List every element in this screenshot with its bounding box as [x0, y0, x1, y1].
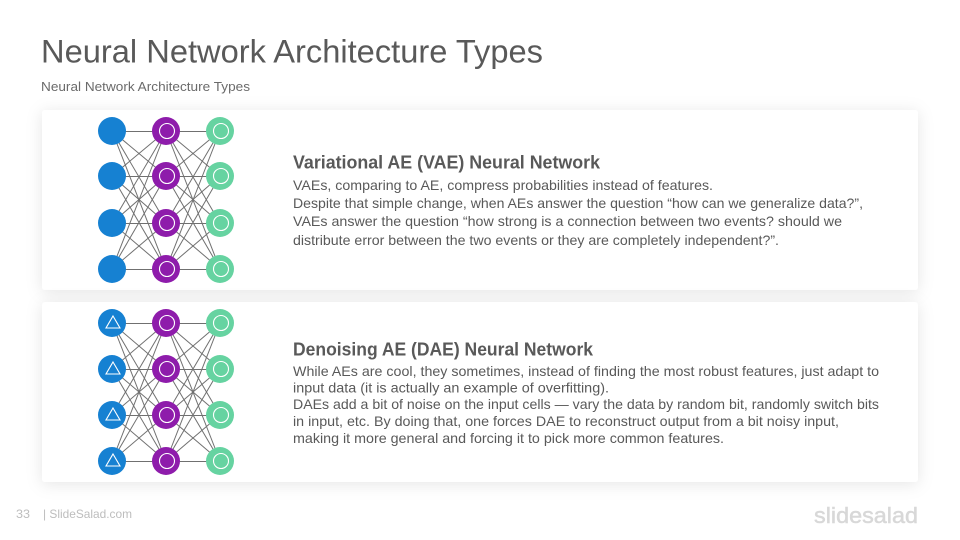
- text block: DAE description: making it more general and forcing it to pick more common features.: [293, 430, 724, 446]
- title: Neural Network Architecture Types: [41, 34, 543, 70]
- text block: VAE description: [293, 177, 863, 248]
- subtitle: Neural Network Architecture Types: [41, 80, 250, 94]
- text block: VAE description: Despite that simple change, when AEs answer the question “how can we generalize data?”,: [293, 195, 863, 211]
- text block: VAE description: VAEs, comparing to AE, compress probabilities instead of features.: [293, 177, 713, 193]
- text block: VAE description: VAEs answer the question “how strong is a connection between two events? should we: [293, 213, 842, 229]
- logo: slidesalad: slidesalad: [814, 503, 918, 528]
- panel background: [42, 302, 918, 482]
- heading: DAE: Denoising AE (DAE) Neural Network: [293, 340, 594, 360]
- panel: variational AE: [42, 110, 918, 290]
- text block: DAE description: in input, etc. By doing that, one forces DAE to reconstruct output from a bit noisy input,: [293, 413, 839, 429]
- panel background: [42, 110, 918, 290]
- footer source: | SlideSalad.com: [43, 507, 132, 521]
- panel: denoising AE: [42, 302, 918, 482]
- text block: DAE description: input data (it is actually an example of overfitting).: [293, 380, 609, 396]
- text block: VAE description: distribute error between the two events or they are completely independent?”.: [293, 232, 779, 248]
- network diagram: VAE: [98, 117, 234, 283]
- text block: DAE description: DAEs add a bit of noise on the input cells — vary the data by random bit, randomly switch bits: [293, 396, 879, 412]
- network diagram: DAE: [98, 309, 234, 475]
- text block: DAE description: [293, 363, 879, 446]
- page number: 33: [16, 507, 30, 521]
- heading: VAE: Variational AE (VAE) Neural Network: [293, 152, 601, 172]
- text block: DAE description: While AEs are cool, they sometimes, instead of finding the most robust features, just adapt to: [293, 363, 879, 379]
